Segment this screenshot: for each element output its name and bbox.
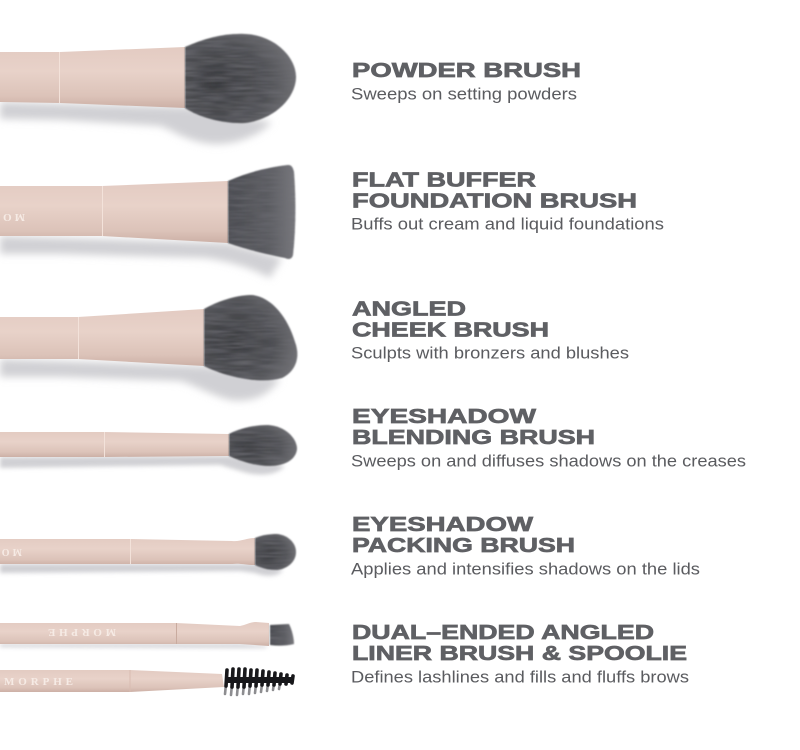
label: dual-ended angled liner brush and spoolie: LINER BRUSH & SPOOLIE [352, 643, 687, 665]
shadow [0, 456, 285, 475]
brush: dual-ended angled liner [0, 622, 294, 648]
label: eyeshadow packing brush [351, 514, 700, 578]
handle [0, 622, 269, 646]
bristles [229, 425, 297, 466]
shadow [0, 644, 268, 648]
shadow [0, 236, 282, 278]
label: eyeshadow packing brush: EYESHADOW [352, 514, 533, 536]
label: dual-ended angled liner brush and spoolie [351, 622, 689, 686]
bristles [185, 34, 296, 123]
shadow [0, 564, 283, 576]
label: powder brush: POWDER BRUSH [352, 60, 581, 82]
label: dual-ended angled liner brush and spoolie: DUAL–ENDED ANGLED [352, 622, 654, 644]
handle [0, 538, 255, 565]
label: powder brush [351, 60, 581, 104]
handle lettering: MORPHE [4, 676, 73, 688]
shadow [0, 359, 280, 401]
label: eyeshadow blending brush: EYESHADOW [352, 406, 536, 428]
bristles [270, 624, 294, 646]
label: powder brush: Sweeps on setting powders [351, 86, 577, 104]
handle [0, 670, 224, 692]
brush: spoolie [0, 669, 293, 695]
label: eyeshadow blending brush [351, 406, 746, 470]
label: eyeshadow packing brush: Applies and intensifies shadows on the lids [351, 560, 700, 578]
brush: flat buffer foundation [0, 165, 295, 278]
label: dual-ended angled liner brush and spoolie: Defines lashlines and fills and fluffs brows [351, 668, 689, 686]
label: eyeshadow packing brush: PACKING BRUSH [352, 535, 575, 557]
handle lettering: MORPHE [48, 626, 116, 638]
label: flat buffer foundation brush: FOUNDATION BRUSH [352, 190, 637, 212]
label: flat buffer foundation brush: FLAT BUFFER [352, 170, 537, 192]
brush: eyeshadow blending [0, 425, 297, 475]
handle [0, 47, 185, 108]
spoolie upper bristles [226, 669, 293, 687]
bristles [204, 295, 297, 380]
label: angled cheek brush: ANGLED [352, 298, 466, 320]
label: eyeshadow blending brush: Sweeps on and diffuses shadows on the creases [351, 452, 746, 470]
brush: eyeshadow packing [0, 534, 296, 576]
label: angled cheek brush [351, 298, 629, 362]
shadow [0, 102, 272, 144]
label: eyeshadow blending brush: BLENDING BRUSH [352, 427, 595, 449]
label: flat buffer foundation brush: Buffs out cream and liquid foundations [351, 216, 664, 234]
handle [0, 432, 229, 457]
handle lettering: MO [0, 211, 25, 223]
bristles [228, 165, 295, 259]
label: angled cheek brush: CHEEK BRUSH [352, 320, 549, 342]
brush: angled cheek [0, 295, 297, 401]
spoolie lower bristles [225, 683, 280, 695]
handle [0, 181, 228, 243]
handle [0, 309, 204, 366]
label: angled cheek brush: Sculpts with bronzers and blushes [351, 344, 629, 362]
label: flat buffer foundation brush [351, 170, 664, 234]
bristles [255, 534, 296, 570]
brush: powder [0, 34, 296, 144]
